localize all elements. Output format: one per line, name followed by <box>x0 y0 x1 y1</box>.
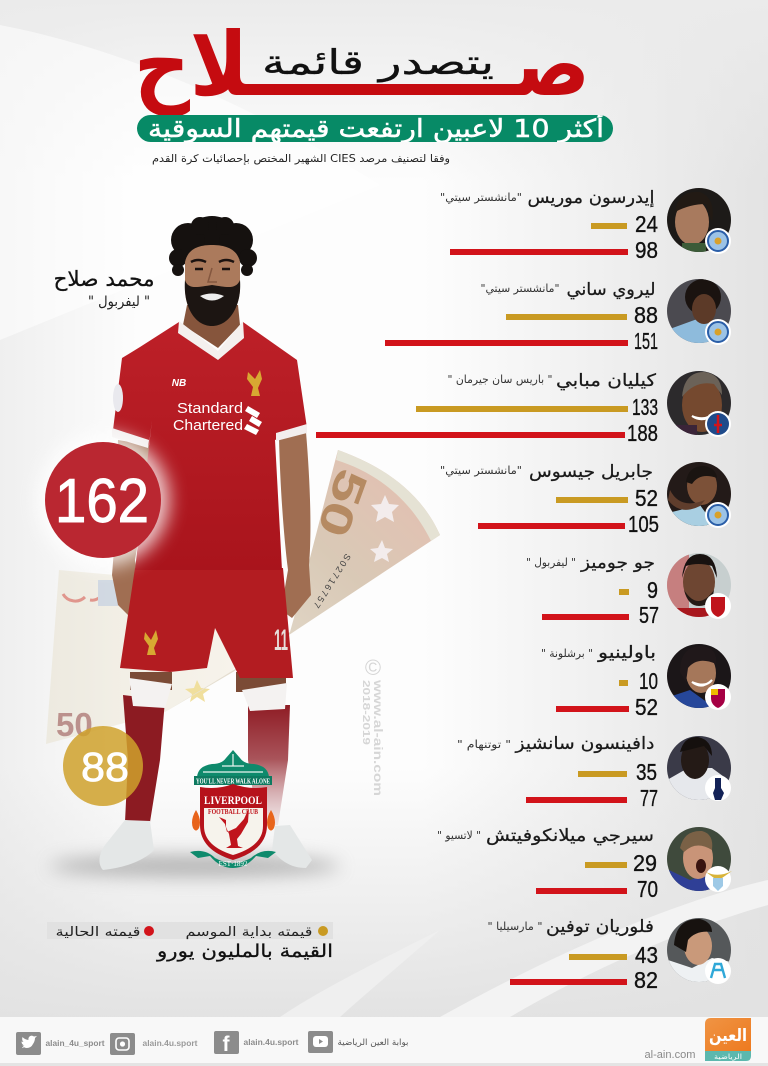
current value: 52 <box>635 694 658 720</box>
row 6 <box>541 643 731 720</box>
current value: 105 <box>628 511 659 537</box>
row 1 <box>440 188 731 263</box>
badge <box>705 228 731 254</box>
shorts <box>120 568 293 678</box>
icon: facebook: f <box>222 1033 230 1056</box>
start bar <box>619 680 628 686</box>
badge <box>705 958 731 984</box>
current bar <box>316 432 625 438</box>
nose <box>208 268 217 282</box>
badge <box>705 319 731 345</box>
watermark: 2018-2019 <box>360 680 372 745</box>
current bar <box>536 888 627 894</box>
sock tops <box>129 678 172 708</box>
right boot <box>272 825 312 868</box>
legend: قيمته الحالية <box>56 925 140 940</box>
start value: 10 <box>639 668 658 694</box>
club: "مانشستر سيتي" <box>440 191 522 204</box>
current key <box>144 926 154 936</box>
right sock <box>248 705 290 825</box>
legend <box>47 922 333 940</box>
sponsor: Standard Chartered: Chartered <box>173 417 243 434</box>
circle: start value 88: 88 <box>81 744 129 790</box>
start value: 9 <box>647 577 658 603</box>
euro banknote right: S02716757 <box>310 552 353 612</box>
photo <box>667 371 731 435</box>
watermark: www.al-ain.com <box>371 679 385 796</box>
current value: 82 <box>634 967 658 993</box>
player name: محمد صلاح <box>54 267 154 291</box>
current value: 151 <box>634 328 658 354</box>
photo <box>667 279 731 343</box>
icon: facebook <box>214 1031 239 1056</box>
title: red word: صــــــــــلاح <box>134 13 590 116</box>
footer: logo: الرياضية <box>714 1053 742 1061</box>
photo <box>667 736 731 800</box>
euro banknote left <box>46 570 250 744</box>
icon: youtube <box>308 1031 333 1053</box>
footer: logo: العين <box>709 1026 747 1046</box>
Liverpool crest: YOU'LL NEVER WALK ALONE <box>196 778 270 786</box>
knees <box>130 672 286 692</box>
subtitle pill: أكثر 10 لاعبين ارتفعت قيمتهم السوقية <box>148 111 604 144</box>
Liverpool crest: LIVERPOOL <box>204 795 262 807</box>
start bar <box>569 954 627 960</box>
sponsor: Standard Chartered <box>173 400 262 435</box>
badge <box>705 866 732 892</box>
start value: 133 <box>632 394 658 420</box>
start value: 52 <box>635 485 658 511</box>
shirt <box>113 322 307 570</box>
euro banknote right <box>165 450 440 712</box>
start bar <box>506 314 627 320</box>
footer: logo: al-ain.com <box>644 1049 696 1061</box>
current bar <box>478 523 625 529</box>
club: " توتنهام " <box>457 738 511 751</box>
club: "مانشستر سيتي" <box>480 282 560 295</box>
badge <box>705 684 731 710</box>
current bar <box>556 706 629 712</box>
current value: 77 <box>640 785 658 811</box>
name: إيدرسون موريس <box>528 188 654 208</box>
name: جابريل جيسوس <box>529 462 653 482</box>
left arm <box>112 440 150 620</box>
row 9 <box>488 917 731 993</box>
player name <box>54 267 154 310</box>
row 3 <box>316 371 731 446</box>
name: كيليان مبابي <box>556 371 657 391</box>
left sock <box>123 695 165 822</box>
name: فلوريان توفين <box>546 917 654 937</box>
badge <box>705 502 731 528</box>
hair <box>169 216 257 276</box>
club: " مارسيليا " <box>488 920 542 933</box>
circle: current value 162: 162 <box>55 467 149 536</box>
photo <box>667 827 731 891</box>
footer: social links: alain_4u_sport <box>46 1038 105 1048</box>
name: باولينيو <box>597 643 656 663</box>
start-of-season key <box>318 926 328 936</box>
current bar <box>385 340 628 346</box>
footer: logo <box>644 1018 751 1061</box>
left sleeve hem <box>112 428 149 448</box>
badge <box>705 775 731 801</box>
circle: start value 88 <box>63 726 143 806</box>
current bar <box>526 797 627 803</box>
Liverpool crest: FOOTBALL CLUB <box>208 808 258 816</box>
left boot <box>99 820 154 870</box>
current value: 188 <box>627 420 658 446</box>
club: " ليفربول " <box>526 556 576 569</box>
beard <box>185 280 240 326</box>
legend: قيمته بداية الموسم <box>186 925 312 940</box>
shirt crest <box>247 370 262 396</box>
start bar <box>585 862 627 868</box>
current bar <box>542 614 629 620</box>
row 7 <box>457 734 731 811</box>
name: سيرجي ميلانكوفيتش <box>486 826 654 846</box>
player name: " ليفربول " <box>88 294 150 310</box>
player shadow <box>50 855 340 877</box>
Liverpool crest <box>190 750 276 868</box>
collar <box>178 321 244 360</box>
name: ليروي ساني <box>566 280 656 300</box>
badge <box>705 593 731 619</box>
brand mark: NB <box>172 378 186 389</box>
watermark: © <box>365 655 381 680</box>
footer: social links: alain.4u.sport <box>142 1038 198 1048</box>
sleeve patch <box>113 384 123 412</box>
start value: 24 <box>635 211 658 237</box>
title: black words: يتصدر قائمة <box>262 43 494 83</box>
club: " باريس سان جيرمان " <box>448 373 552 386</box>
start bar <box>619 589 629 595</box>
photo <box>667 553 731 618</box>
watermark <box>360 655 385 796</box>
photo <box>667 462 731 526</box>
circle: current value 162 <box>37 434 169 566</box>
row 4 <box>440 462 731 537</box>
name: جو جوميز <box>580 553 655 573</box>
sponsor: Standard Chartered: Standard <box>177 400 243 417</box>
smile <box>200 294 224 300</box>
footer: social links: بوابة العين الرياضية <box>338 1038 408 1048</box>
photo <box>667 188 731 253</box>
row 8 <box>437 826 732 902</box>
photo <box>667 918 731 982</box>
neck <box>183 305 240 348</box>
start value: 88 <box>634 302 658 328</box>
photo <box>667 644 731 708</box>
current value: 57 <box>639 602 659 628</box>
start bar <box>578 771 627 777</box>
Liverpool crest: EST·1892 <box>219 860 248 868</box>
shorts crest <box>144 630 158 655</box>
badge <box>705 411 731 437</box>
club: "مانشستر سيتي" <box>440 464 522 477</box>
start bar <box>556 497 628 503</box>
start bar <box>416 406 628 412</box>
current value: 70 <box>637 876 658 902</box>
right arm <box>279 432 311 618</box>
club: " لاتسيو " <box>437 829 481 842</box>
legend heading: القيمة بالمليون يورو <box>156 941 333 962</box>
row 5 <box>526 553 731 628</box>
name: دافينسون سانشيز <box>514 734 654 754</box>
start value: 43 <box>635 942 658 968</box>
footer: social links: alain.4u.sport <box>244 1037 299 1047</box>
player: Mohamed Salah <box>99 216 312 870</box>
icon: twitter <box>16 1032 41 1055</box>
start value: 35 <box>636 759 657 785</box>
club: " برشلونة " <box>541 647 593 660</box>
current bar <box>450 249 628 255</box>
start value: 29 <box>633 850 657 876</box>
current bar <box>510 979 627 985</box>
player: Mohamed Salah: 11 <box>274 624 288 657</box>
footer: social links <box>16 1031 408 1056</box>
source note: وفقا لتصنيف مرصد CIES الشهير المختص بإحصائيات كرة القدم <box>152 153 450 165</box>
current value: 98 <box>635 237 658 263</box>
start bar <box>591 223 627 229</box>
row 2 <box>385 279 731 354</box>
icon: instagram <box>110 1033 135 1055</box>
face <box>185 245 240 322</box>
right sleeve hem <box>276 424 307 441</box>
euro banknote left: 50 <box>56 706 93 743</box>
eyes <box>191 260 234 262</box>
euro banknote right: 50 <box>307 463 377 543</box>
